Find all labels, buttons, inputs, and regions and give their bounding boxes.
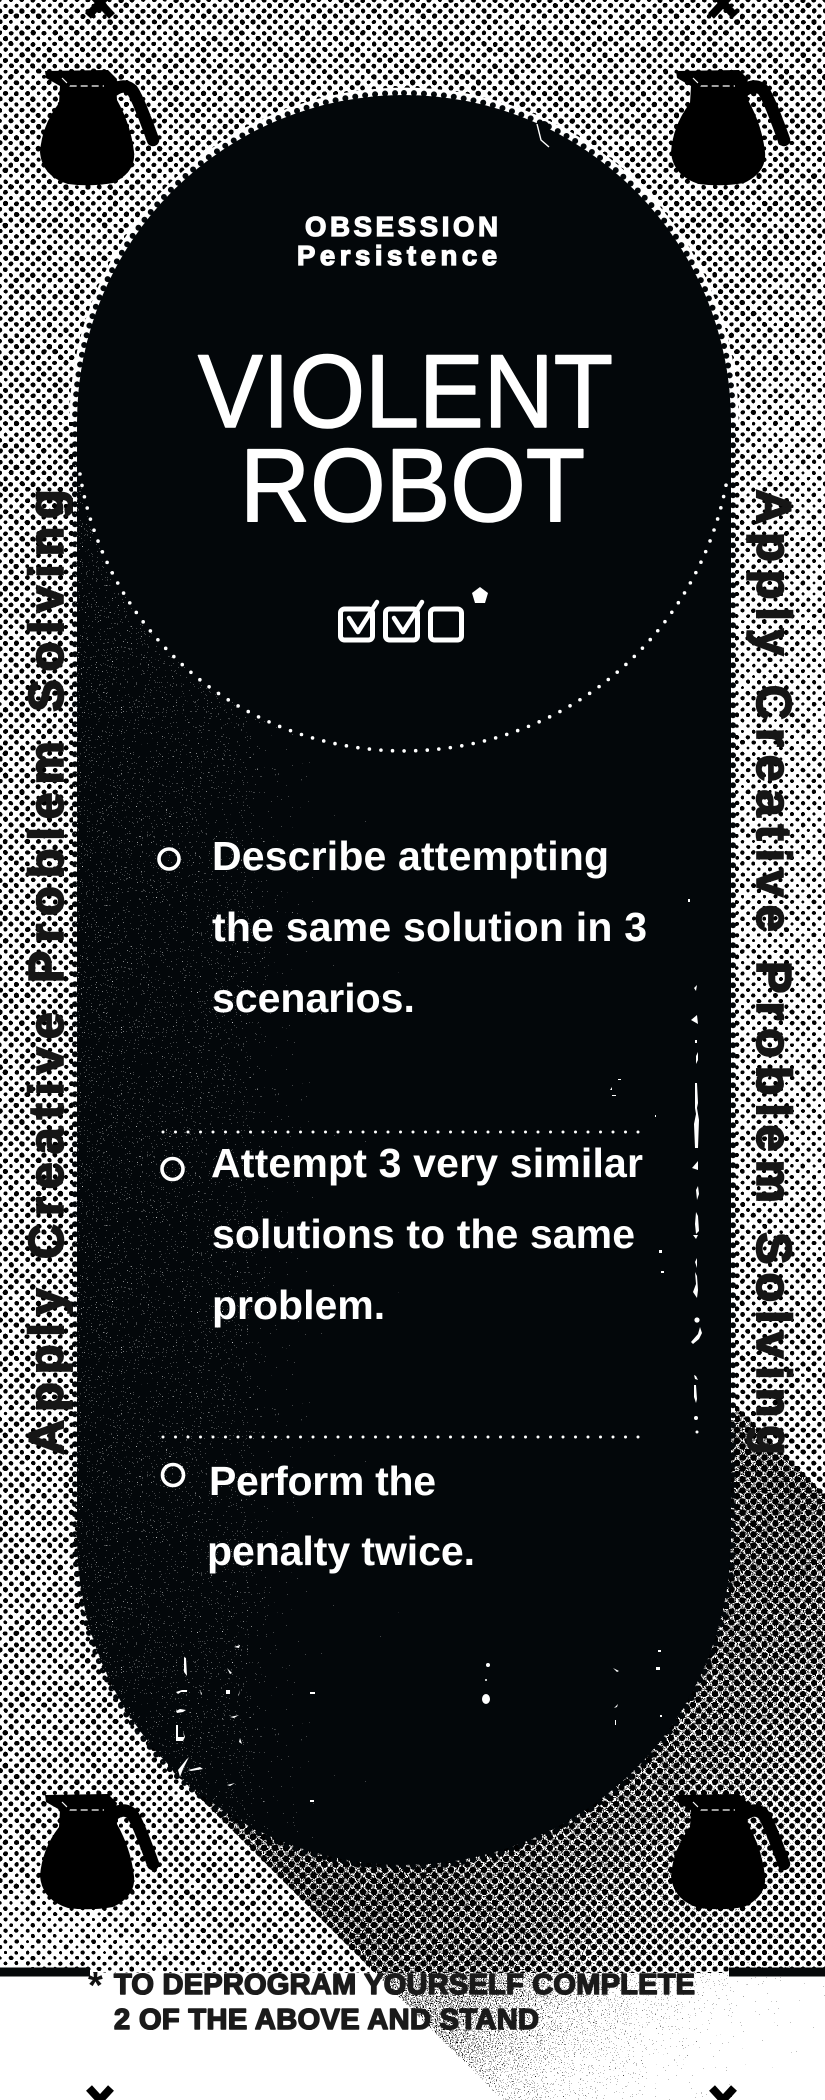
bullet three [162,1464,184,1486]
item two text: solutions to the same [212,1211,635,1257]
item three [162,1458,475,1574]
crop mark: top right [711,0,735,16]
icon: coffee pot bottom left [40,1794,153,1909]
title [198,334,613,544]
bullet two [162,1158,183,1180]
item two [162,1140,643,1328]
item one [159,833,647,1021]
footnote: 2 OF THE ABOVE AND STAND [114,2004,539,2036]
heading: eyebrow: Persistence [297,240,497,271]
side label left: Apply Creative Problem Solving [20,489,74,1455]
crop mark: bottom left [89,2088,111,2100]
divider dots one [163,1130,640,1134]
icon: rating checkboxes [340,587,488,640]
diagonal stippled shadow [172,1306,825,2100]
white stipple inside capsule [75,422,404,1870]
item one text: Describe attempting [212,833,609,879]
heading: eyebrow [297,211,498,271]
white footer panel [0,1973,825,2100]
icon: coffee pot top left [40,70,153,185]
item one text [212,833,647,1021]
white ink speckles right [610,899,702,1434]
capsule edge notch [537,121,549,147]
footnote [114,1969,695,2036]
footer rule pieces [0,1968,825,1976]
heading: eyebrow: OBSESSION [305,211,498,242]
title: ROBOT [240,428,585,544]
white ink speckles bottom [176,1645,662,1802]
divider dots two [163,1436,640,1438]
title: VIOLENT [198,334,613,450]
item two text [211,1140,643,1328]
crop mark: top left [88,0,112,16]
bullet one [159,849,179,869]
dotted circle arc [80,474,728,751]
capsule panel [75,93,733,1867]
icon: coffee pot bottom right [671,1794,784,1909]
item one text: the same solution in 3 [212,904,647,950]
icon: coffee pot top right [671,70,784,185]
crop mark: bottom right [712,2088,734,2100]
item three text [207,1458,475,1574]
asterisk: * [88,1965,103,2007]
side label right: Apply Creative Problem Solving [746,489,800,1455]
item two text: Attempt 3 very similar [211,1140,643,1186]
item two text: problem. [212,1282,385,1328]
item one text: scenarios. [212,975,415,1021]
footnote: TO DEPROGRAM YOURSELF COMPLETE [114,1969,695,2001]
item three text: penalty twice. [207,1528,475,1574]
item three text: Perform the [209,1458,436,1504]
